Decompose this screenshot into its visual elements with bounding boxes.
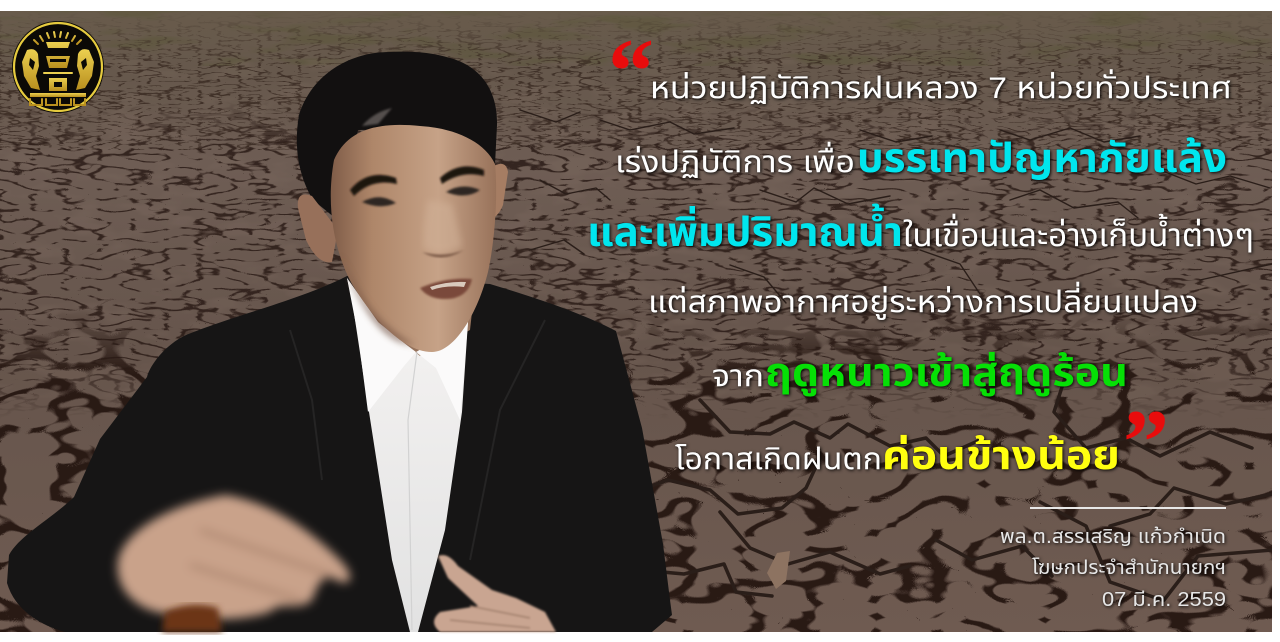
line 4: แต่สภาพอากาศอยู่ระหว่างการเปลี่ยนแปลง — [648, 281, 1198, 320]
dry leaf on the ground — [767, 551, 790, 589]
ground cracks — [520, 110, 1272, 600]
line 1: หน่วยปฏิบัติการฝนหลวง 7 หน่วยทั่วประเทศ — [650, 69, 1232, 105]
government seal logo — [12, 21, 104, 113]
line 5 highlight green: ฤดูหนาวเข้าสู่ฤดูร้อน — [765, 350, 1128, 397]
mouth — [420, 279, 472, 299]
face — [331, 125, 496, 352]
eyes — [362, 186, 480, 206]
opening quotation mark: “ — [608, 20, 654, 122]
line 6 lead: โอกาสเกิดฝนตก — [675, 443, 882, 476]
white shirt — [347, 278, 468, 632]
speaker role: โฆษกประจำสำนักนายกฯ — [1032, 557, 1226, 579]
line 3 highlight cyan: และเพิ่มปริมาณน้ำ — [587, 203, 903, 255]
left ear — [298, 194, 338, 262]
open hand — [434, 555, 556, 632]
neck — [350, 240, 480, 358]
speaker name: พล.ต.สรรเสริญ แก้วกำเนิด — [1000, 525, 1226, 548]
jacket — [7, 276, 672, 632]
line 2 highlight cyan: บรรเทาปัญหาภัยแล้ง — [857, 135, 1227, 181]
date: 07 มี.ค. 2559 — [1102, 589, 1226, 611]
line 6 highlight yellow: ค่อนข้างน้อย — [882, 433, 1120, 478]
line 2 lead: เร่งปฏิบัติการ เพื่อ — [615, 141, 855, 179]
pointing hand (motion blurred) — [117, 495, 350, 619]
nose shadow — [422, 250, 464, 258]
jaw shade — [340, 250, 415, 345]
forehead hair highlight — [362, 108, 392, 126]
nose highlight — [424, 200, 462, 253]
attribution — [1000, 507, 1226, 611]
right ear — [486, 164, 508, 222]
line 5 lead: จาก — [712, 360, 764, 393]
speaker portrait — [7, 52, 672, 632]
eyebrows — [350, 166, 484, 196]
sleeve cuff item — [162, 605, 222, 632]
closing quotation mark: ” — [1123, 391, 1169, 493]
head hair — [297, 52, 497, 222]
quote text — [587, 69, 1254, 478]
line 3 tail: ในเขื่อนและอ่างเก็บน้ำต่างๆ — [903, 213, 1254, 253]
